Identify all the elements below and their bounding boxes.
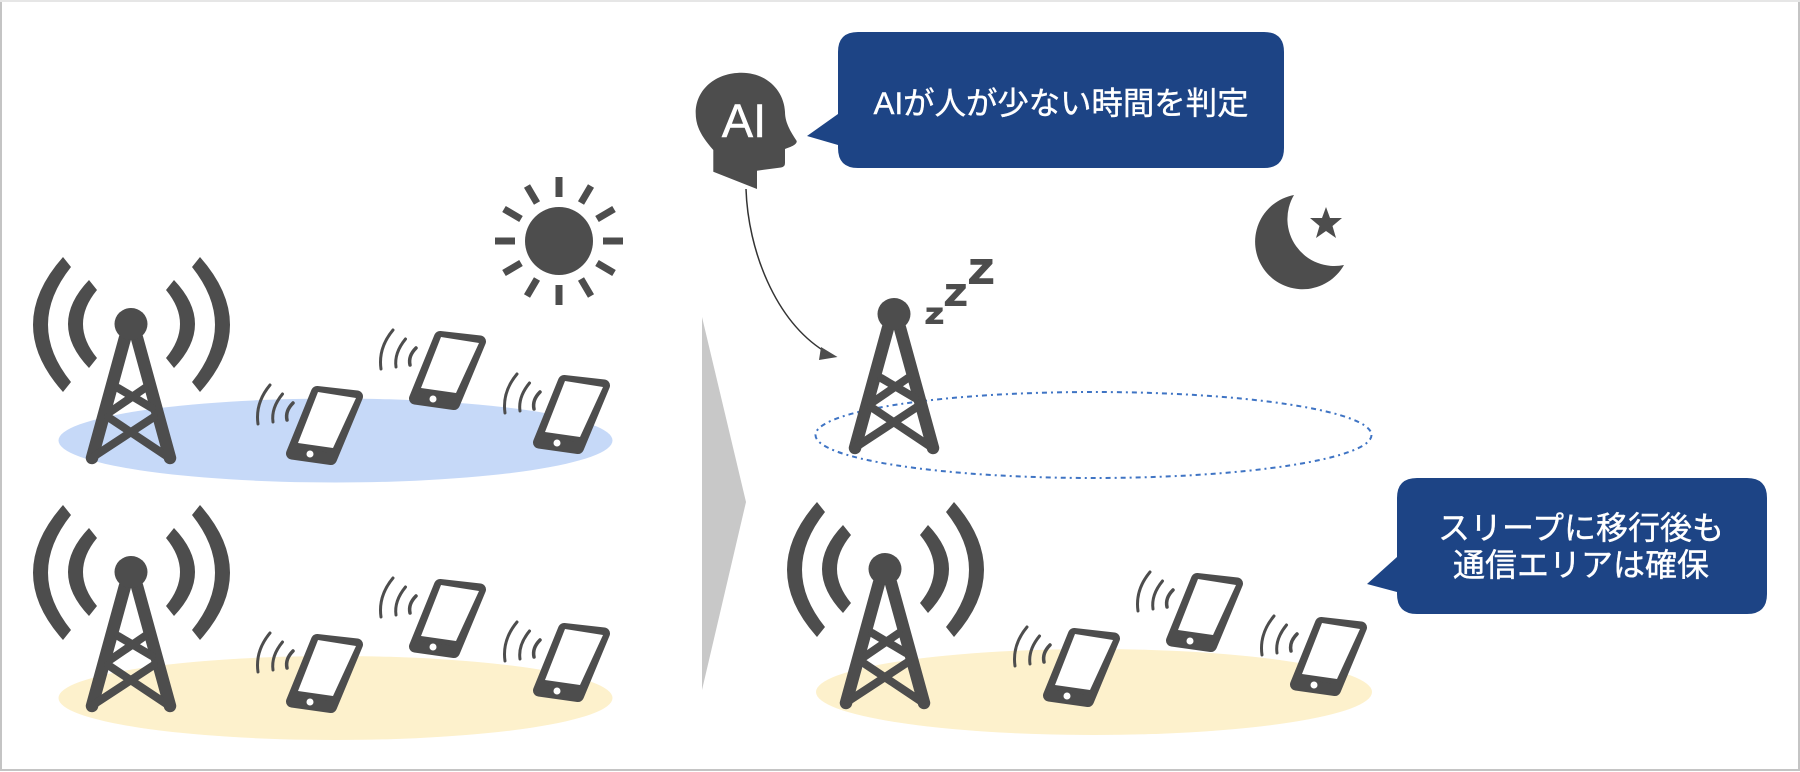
sleeping tower (855, 298, 933, 448)
icon: sleeping z letters (926, 253, 993, 328)
panel: daytime base station with blue coverage area (33, 257, 612, 482)
icon: moon and star (1255, 195, 1344, 289)
tower with radio waves (787, 502, 984, 703)
AI label: AI (722, 94, 766, 147)
panel: sleeping base station with dashed area (816, 298, 1372, 478)
callout: coverage maintained after sleep: スリープに移行後も (1438, 510, 1724, 546)
icon: sun (495, 177, 623, 305)
icon: sleeping z letters: Z (969, 253, 993, 290)
tower with radio waves (33, 257, 230, 458)
callout: AI judges low-traffic time (807, 32, 1284, 168)
icon: AI head (696, 73, 797, 189)
arrow: AI to sleeping tower (746, 189, 838, 360)
dashed coverage outline (816, 392, 1372, 478)
panel: neighbouring base station keeps coverage (787, 502, 1372, 735)
icon: sleeping z letters: Z (926, 305, 943, 328)
callout: AI judges low-traffic time: AIが人が少ない時間を判定 (874, 86, 1248, 121)
arrow: transition triangle (702, 317, 746, 690)
yellow coverage ellipse (816, 649, 1372, 735)
icon: sleeping z letters: Z (945, 279, 966, 311)
blue coverage ellipse (58, 398, 612, 482)
panel: daytime base station with yellow coverage area (33, 505, 612, 740)
yellow coverage ellipse (58, 656, 612, 740)
callout: coverage maintained after sleep: 通信エリアは確保 (1453, 547, 1709, 583)
phones in yellow area (258, 578, 604, 707)
callout: coverage maintained after sleep (1367, 478, 1767, 614)
tower with radio waves (33, 505, 230, 706)
phones in coverage (1014, 572, 1361, 701)
phones in blue area (258, 330, 604, 459)
